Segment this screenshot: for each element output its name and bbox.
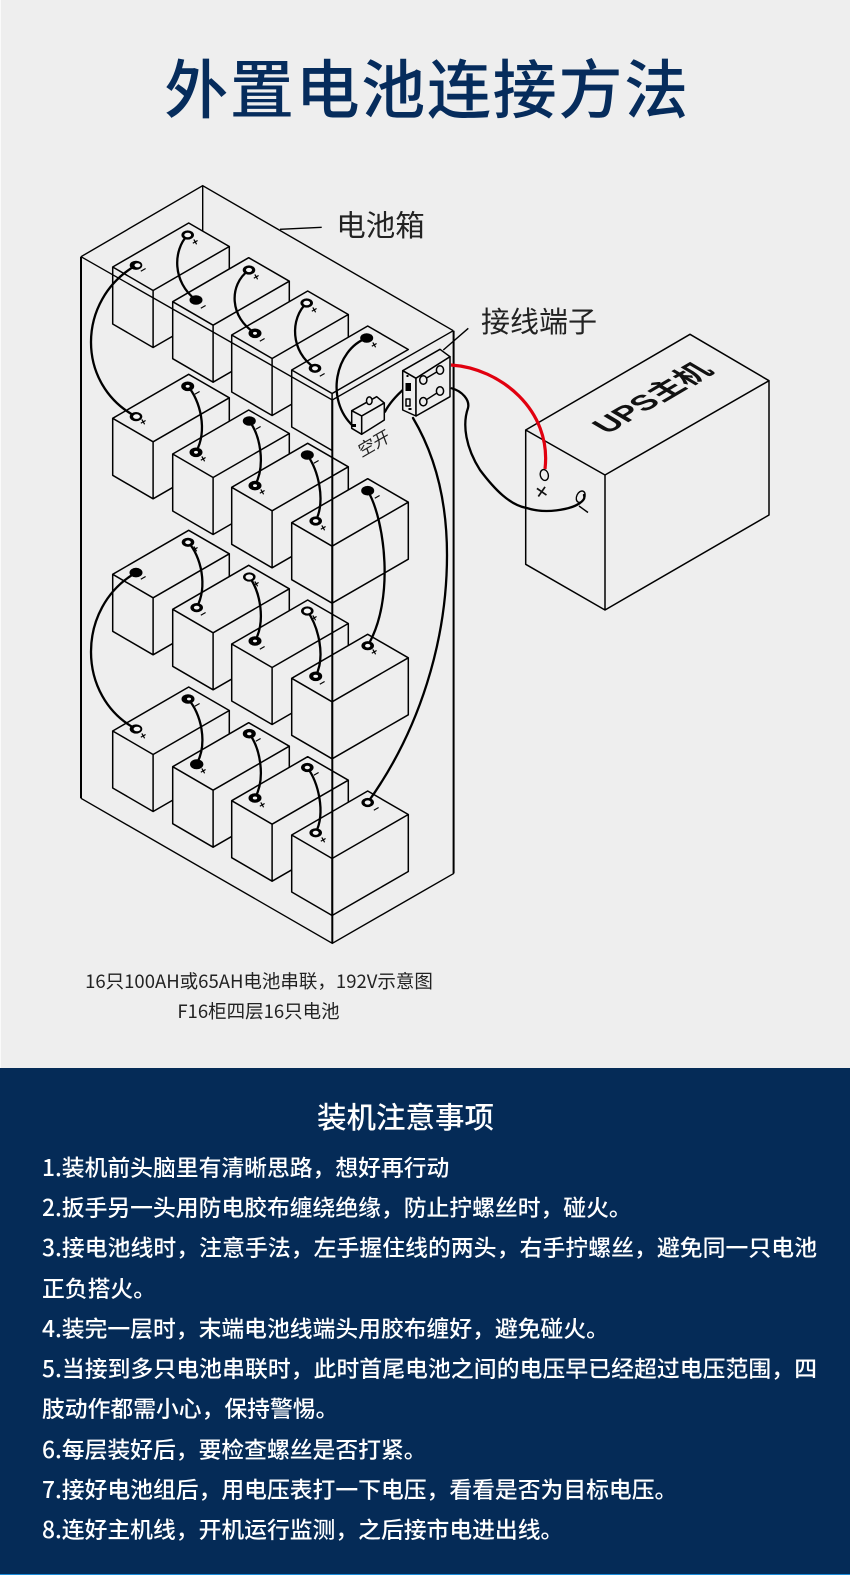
wiring diagram bbox=[80, 184, 770, 1024]
battery row 3 bbox=[113, 530, 408, 759]
label: terminal block: 接线端子 bbox=[481, 299, 597, 341]
battery terminals row 4: + bbox=[257, 799, 268, 812]
battery terminals row 4: − bbox=[192, 699, 203, 712]
battery terminals row 2 bbox=[130, 382, 383, 535]
battery terminals row 2: − bbox=[311, 456, 322, 469]
note 5: 5.当接到多只电池串联时，此时首尾电池之间的电压早已经超过电压范围，四 bbox=[42, 1351, 817, 1384]
battery link wires bbox=[91, 235, 447, 833]
UPS negative terminal and sign bbox=[575, 490, 588, 512]
note 3 continued: 正负搭火。 bbox=[42, 1271, 156, 1304]
UPS positive terminal and sign: + bbox=[528, 477, 555, 507]
caption: F16柜四层16只电池 bbox=[177, 998, 340, 1024]
negative cable bbox=[452, 388, 584, 511]
battery terminals row 2: − bbox=[192, 387, 203, 400]
note 7: 7.接好电池组后，用电压表打一下电压，看看是否为目标电压。 bbox=[42, 1472, 677, 1505]
battery terminals row 1: − bbox=[198, 301, 209, 314]
cabinet back edges bbox=[81, 186, 453, 331]
circuit breaker bbox=[352, 388, 405, 434]
UPS main unit bbox=[526, 334, 769, 610]
battery terminals row 2: + bbox=[318, 522, 329, 535]
battery terminals row 2: + bbox=[138, 416, 149, 429]
battery terminals row 3: − bbox=[138, 572, 149, 585]
title: 外置电池连接方法 bbox=[164, 40, 690, 132]
battery terminals row 1: + bbox=[309, 304, 320, 317]
note 2: 2.扳手另一头用防电胶布缠绕绝缘，防止拧螺丝时，碰火。 bbox=[42, 1190, 632, 1223]
note 3: 3.接电池线时，注意手法，左手握住线的两头，右手拧螺丝，避免同一只电池 bbox=[42, 1230, 817, 1263]
battery terminals row 4: + bbox=[198, 765, 209, 778]
caption: 16只100AH或65AH电池串联，192V示意图 bbox=[85, 968, 433, 994]
note 1: 1.装机前头脑里有清晰思路，想好再行动 bbox=[42, 1150, 449, 1183]
caption bbox=[85, 968, 433, 1024]
cabinet front edges bbox=[81, 257, 454, 943]
panel heading: 装机注意事项 bbox=[317, 1095, 494, 1137]
connection terminal block bbox=[403, 349, 450, 416]
battery terminals row 2: + bbox=[257, 486, 268, 499]
panel: installation notes bbox=[0, 1068, 850, 1574]
battery terminals row 4: + bbox=[138, 730, 149, 743]
battery terminals row 3 bbox=[130, 538, 380, 690]
battery terminals row 3: + bbox=[369, 646, 380, 659]
battery terminals row 3: − bbox=[317, 677, 328, 690]
battery terminals row 1: + bbox=[190, 236, 201, 249]
label: battery cabinet: 电池箱 bbox=[336, 203, 425, 245]
battery terminals row 2: + bbox=[198, 453, 209, 466]
UPS label: UPS主机 bbox=[584, 358, 720, 438]
positive cable (red) bbox=[451, 365, 546, 469]
note 5 continued: 肢动作都需小心，保持警惕。 bbox=[42, 1391, 338, 1424]
battery terminals row 3: + bbox=[251, 578, 262, 591]
leader: cabinet bbox=[280, 227, 322, 229]
battery terminals row 3: − bbox=[198, 608, 209, 621]
battery terminals row 1: − bbox=[138, 264, 149, 277]
battery terminals row 4: + bbox=[318, 834, 329, 847]
note 4: 4.装完一层时，末端电池线端头用胶布缠好，避免碰火。 bbox=[42, 1311, 609, 1344]
leader: terminal block bbox=[443, 328, 468, 350]
battery row 2 bbox=[113, 374, 408, 603]
battery terminals row 1: − bbox=[257, 334, 268, 347]
decorative left strip bbox=[0, 0, 1, 1068]
battery terminals row 2: − bbox=[253, 422, 264, 435]
battery terminals row 1: + bbox=[369, 339, 380, 352]
battery terminals row 4: − bbox=[253, 734, 264, 747]
battery row 4 bbox=[113, 687, 408, 916]
battery terminals row 3: − bbox=[257, 642, 268, 655]
battery terminals row 3: + bbox=[190, 543, 201, 556]
breaker label: 空开 bbox=[354, 422, 393, 462]
battery row 1 bbox=[113, 223, 408, 450]
bottom rule bbox=[0, 1574, 850, 1575]
battery terminals row 3: + bbox=[309, 612, 320, 625]
battery terminals row 4: − bbox=[371, 803, 382, 816]
note 6: 6.每层装好后，要检查螺丝是否打紧。 bbox=[42, 1432, 427, 1465]
battery terminals row 4: − bbox=[311, 768, 322, 781]
battery terminals row 1: − bbox=[317, 369, 328, 382]
battery terminals row 2: − bbox=[372, 491, 383, 504]
battery terminals row 4 bbox=[130, 694, 382, 847]
note 8: 8.连好主机线，开机运行监测，之后接市电进出线。 bbox=[42, 1512, 563, 1545]
battery terminals row 1: + bbox=[251, 271, 262, 284]
battery terminals row 1 bbox=[130, 230, 380, 382]
